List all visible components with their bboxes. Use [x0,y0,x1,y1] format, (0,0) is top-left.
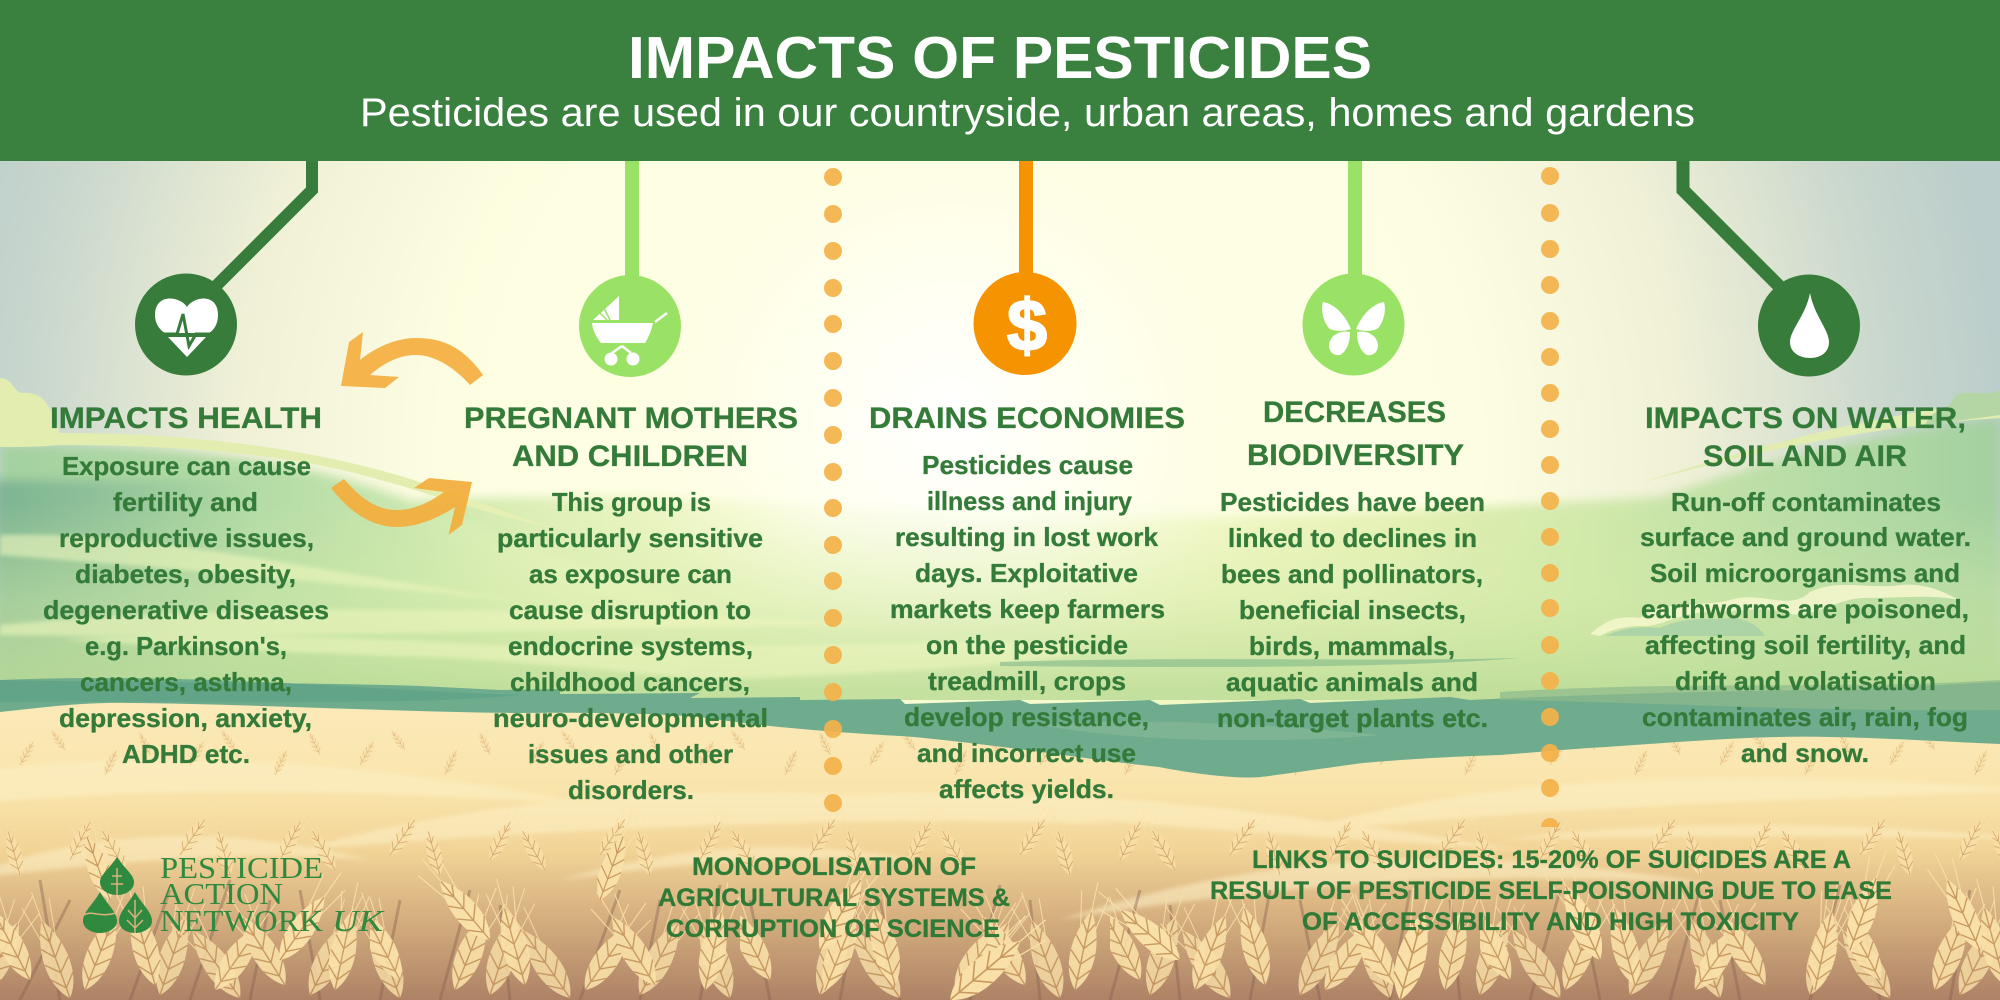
connector line [1683,161,1780,287]
icon: dollar sign [974,272,1076,375]
body text: degenerative diseases [43,595,329,625]
body text: and incorrect use [917,738,1136,768]
heading: IMPACTS HEALTH [50,402,322,435]
body text [43,451,329,769]
body text [1640,487,1971,768]
dotted divider: left [824,168,842,812]
body text: reproductive issues, [59,523,314,553]
body text: This group is [552,487,711,517]
panel: impacts health [43,161,329,769]
callout: monopolisation: MONOPOLISATION OF [692,853,976,881]
field swooshes [0,759,2000,920]
stalks and foreground wheat ears [0,808,2000,1000]
body text: affects yields. [939,774,1114,804]
connector line [1348,161,1362,281]
callout: links to suicides [1210,846,1892,936]
body text [1217,487,1488,733]
panel: drains economies [869,161,1185,804]
panel: impacts on water, soil and air [1640,161,1971,768]
heading [1645,402,1966,473]
body text: and snow. [1741,738,1869,768]
connector line [625,161,639,281]
heading: PREGNANT MOTHERS [464,402,798,435]
callout: links to suicides: RESULT OF PESTICIDE SELF-POISONING DUE TO EASE [1210,877,1892,905]
heading: DRAINS ECONOMIES [869,402,1185,435]
rolling hills [0,418,2000,800]
logo wordmark: PESTICIDE [160,850,323,885]
body text: days. Exploitative [915,558,1138,588]
hill streaks [0,535,1081,680]
logo wordmark [160,850,386,938]
body text: ADHD etc. [122,739,250,769]
body text: Pesticides cause [922,450,1133,480]
logo wordmark: UK [332,903,386,938]
body text: endocrine systems, [508,631,753,661]
body text: develop resistance, [904,702,1149,732]
body text: Soil microorganisms and [1650,558,1960,588]
panel: pregnant mothers and children [464,161,798,805]
body text: drift and volatisation [1675,666,1936,696]
body text: beneficial insects, [1239,595,1466,625]
body text: earthworms are poisoned, [1641,594,1969,624]
header banner [0,0,2000,161]
body text: treadmill, crops [928,666,1126,696]
right distant tree line [1590,585,1960,636]
body text: as exposure can [529,559,732,589]
heading [1247,396,1464,472]
body text: non-target plants etc. [1217,703,1488,733]
body text: disorders. [568,775,694,805]
callout: links to suicides: OF ACCESSIBILITY AND HIGH TOXICITY [1302,908,1799,936]
body text: resulting in lost work [895,522,1159,552]
body text: markets keep farmers [890,594,1165,624]
left hill outline and trees [0,378,560,530]
title: IMPACTS OF PESTICIDES [628,25,1372,91]
body text: affecting soil fertility, and [1645,630,1966,660]
icon: butterfly [1302,274,1404,376]
body text [890,450,1165,804]
body text: illness and injury [927,486,1133,516]
body text: cause disruption to [509,595,751,625]
callout: links to suicides: LINKS TO SUICIDES: 15-20% OF SUICIDES ARE A [1252,846,1851,874]
callout: monopolisation [658,853,1010,943]
logo mark: three drops [83,857,152,933]
arrow: health on to pregnant mothers [331,478,472,535]
body text: contaminates air, rain, fog [1642,702,1968,732]
heading: IMPACTS ON WATER, [1645,402,1966,435]
body text: issues and other [528,739,733,769]
body text: Pesticides have been [1220,487,1485,517]
icon: heart with pulse [135,274,237,376]
distant water band [0,678,2000,790]
arrow: pregnant mothers back to health [341,332,483,388]
icon: water drop [1758,274,1860,376]
callout: monopolisation: CORRUPTION OF SCIENCE [666,915,1000,943]
body text: depression, anxiety, [59,703,312,733]
icon: pram [579,275,681,377]
subtitle: Pesticides are used in our countryside, urban areas, homes and gardens [360,91,1695,135]
heading [464,402,798,473]
right hill crest and trees [1640,400,2000,483]
body text: linked to declines in [1228,523,1477,553]
logo wordmark: ACTION [160,876,283,911]
body text: fertility and [113,487,258,517]
callout: monopolisation: AGRICULTURAL SYSTEMS & [658,884,1010,912]
body text: Run-off contaminates [1671,487,1941,517]
connector line [1019,161,1033,281]
lime meadow haze [0,500,2000,700]
body text: e.g. Parkinson's, [85,631,287,661]
body text: neuro-developmental [493,703,768,733]
logo: Pesticide Action Network UK [83,850,386,938]
logo wordmark: NETWORK [160,903,324,938]
body text: on the pesticide [926,630,1128,660]
body text: birds, mammals, [1249,631,1455,661]
body text: particularly sensitive [497,523,763,553]
heading: BIODIVERSITY [1247,439,1464,472]
body text: surface and ground water. [1640,522,1971,552]
body text: cancers, asthma, [80,667,292,697]
dotted divider: right [1541,167,1559,827]
heading: SOIL AND AIR [1703,440,1907,473]
small distant wheat ears [20,730,1987,775]
body text: aquatic animals and [1226,667,1478,697]
body text: Exposure can cause [62,451,311,481]
body text: bees and pollinators, [1221,559,1483,589]
wheat field [0,690,2000,1000]
heading: DECREASES [1263,396,1446,429]
panel: decreases biodiversity [1217,161,1488,733]
body text [493,487,768,805]
icon: dollar sign: $ [1007,286,1047,366]
body text: childhood cancers, [510,667,750,697]
heading: AND CHILDREN [512,440,748,473]
body text: diabetes, obesity, [75,559,296,589]
connector line [215,161,312,287]
